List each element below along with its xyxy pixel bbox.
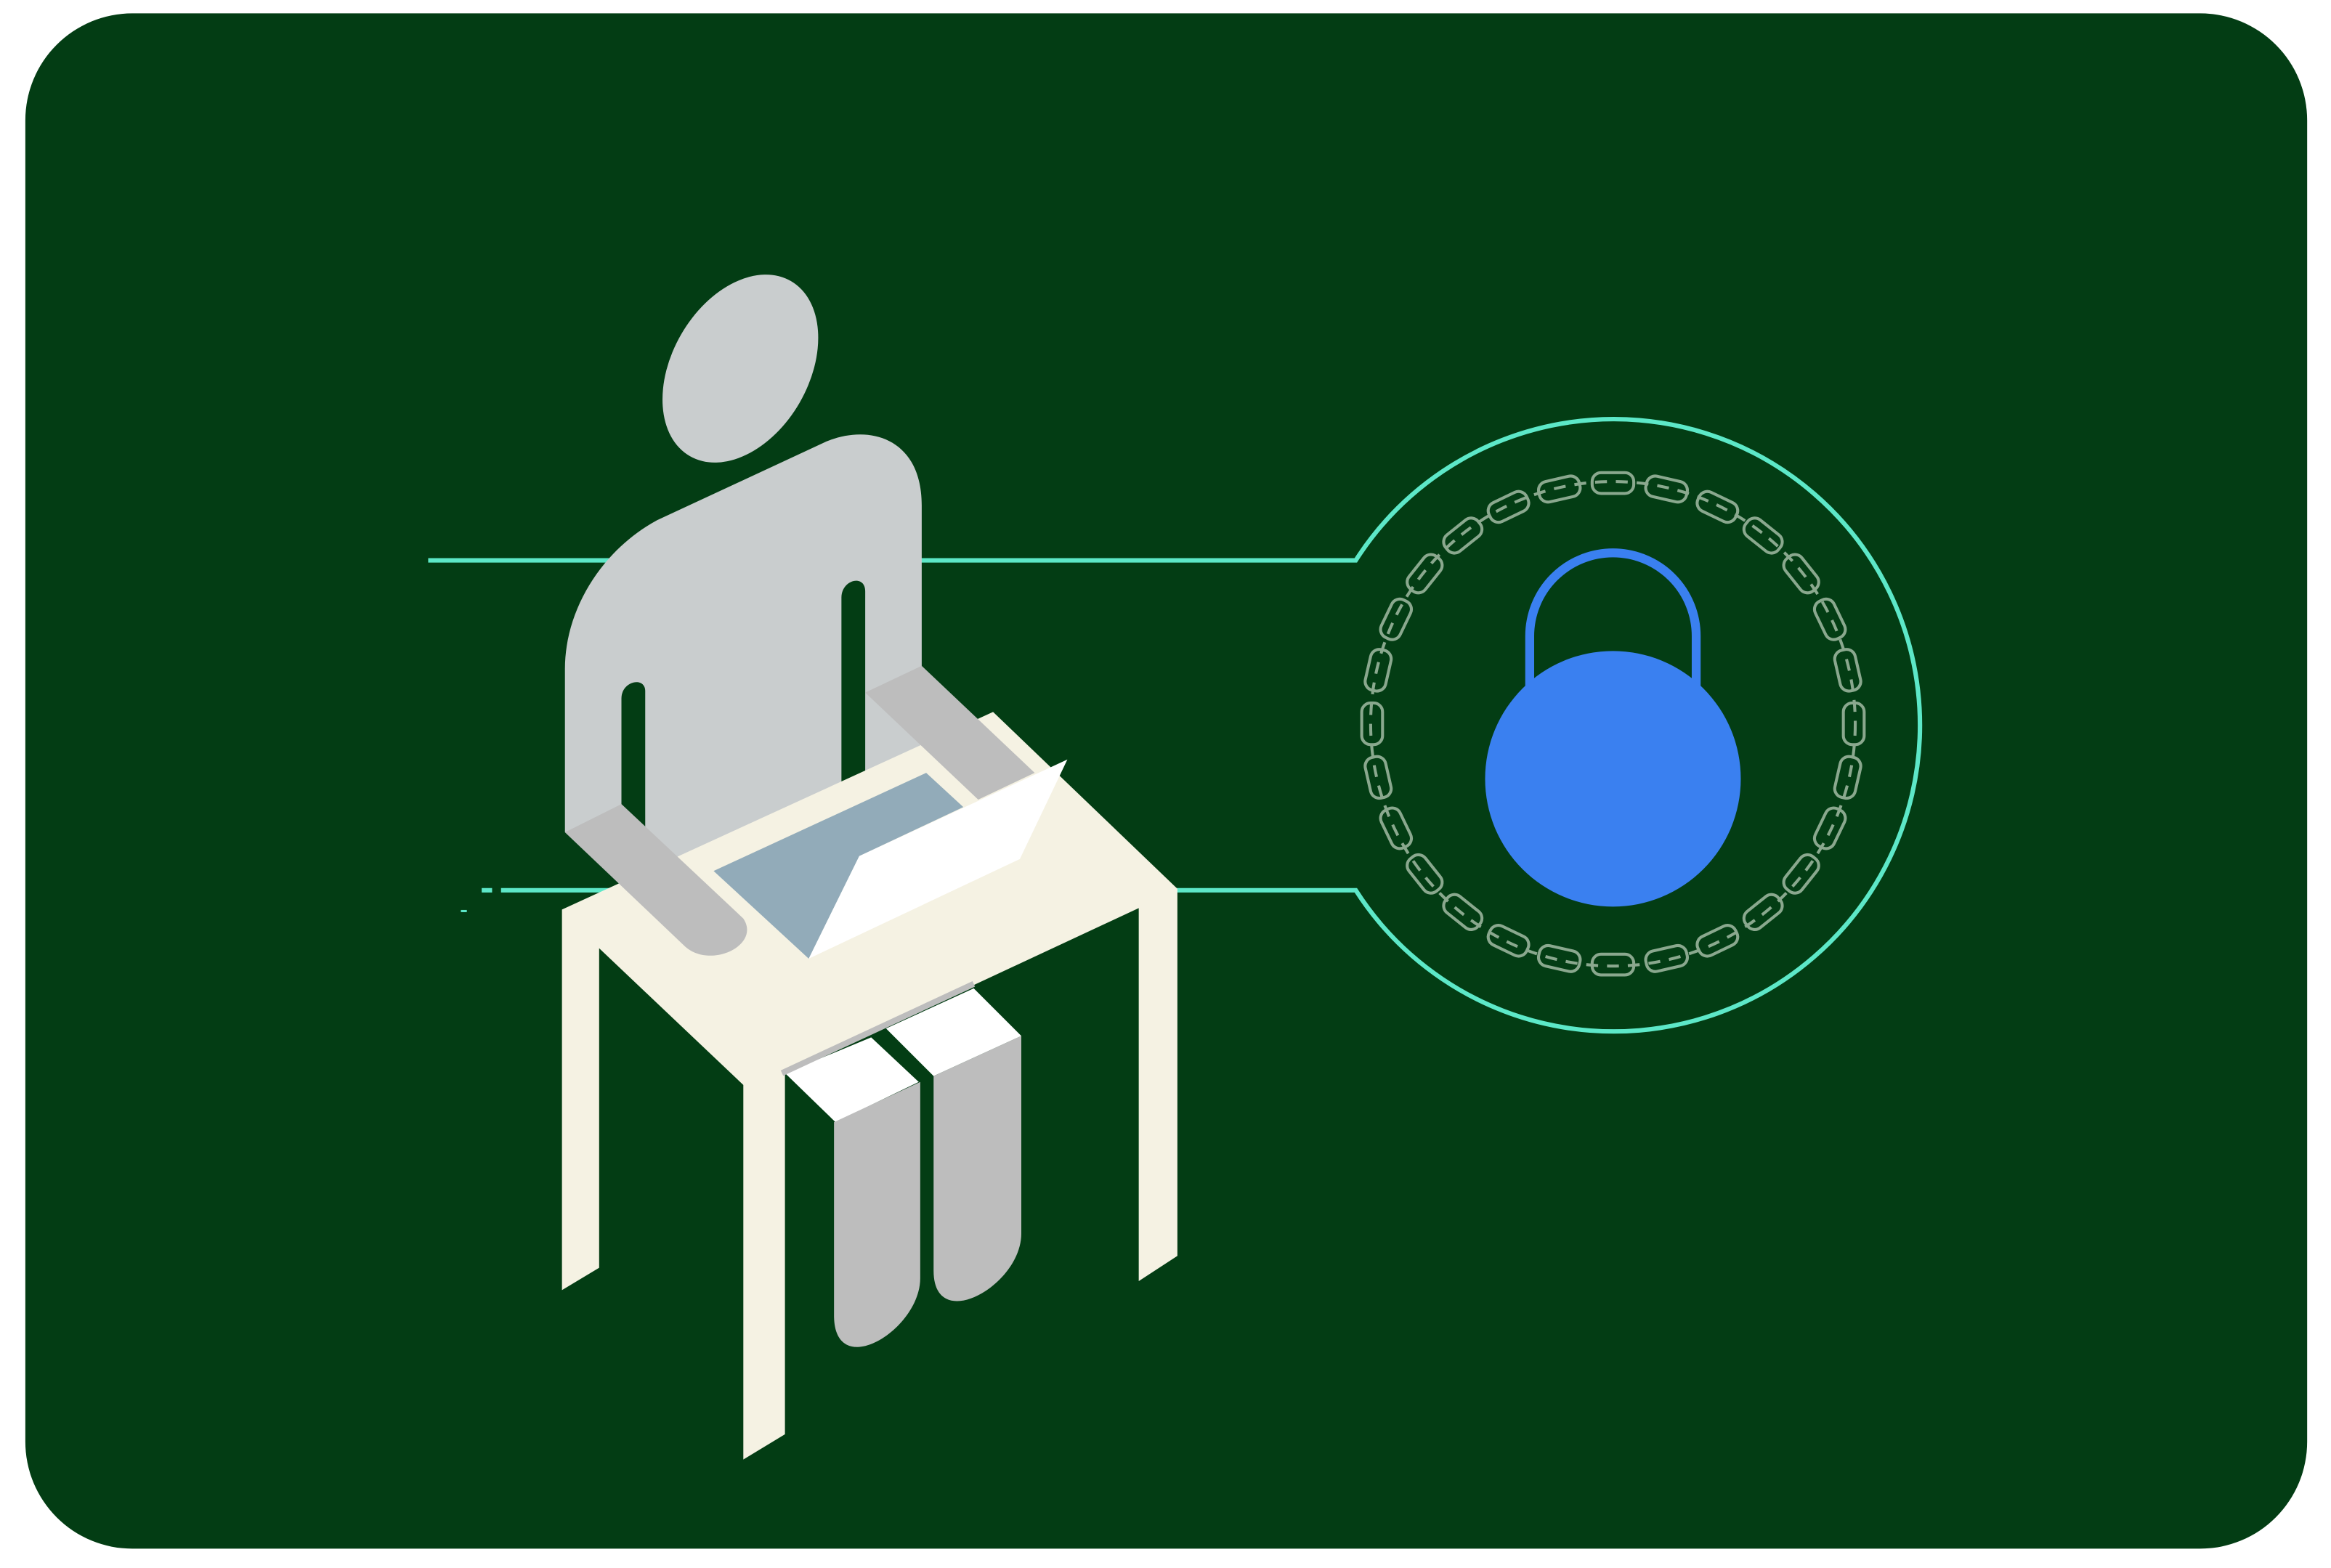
- connector lines and circle outline: [428, 419, 1920, 1031]
- desk: [562, 712, 1177, 1460]
- person: torso: [565, 434, 922, 892]
- icon: chain ring: [1362, 473, 1864, 975]
- person: thighs and shins: [785, 988, 1021, 1347]
- person: head: [631, 247, 850, 490]
- icon: padlock: [1485, 553, 1740, 906]
- laptop: [713, 760, 1067, 959]
- person: arms: [565, 666, 1034, 956]
